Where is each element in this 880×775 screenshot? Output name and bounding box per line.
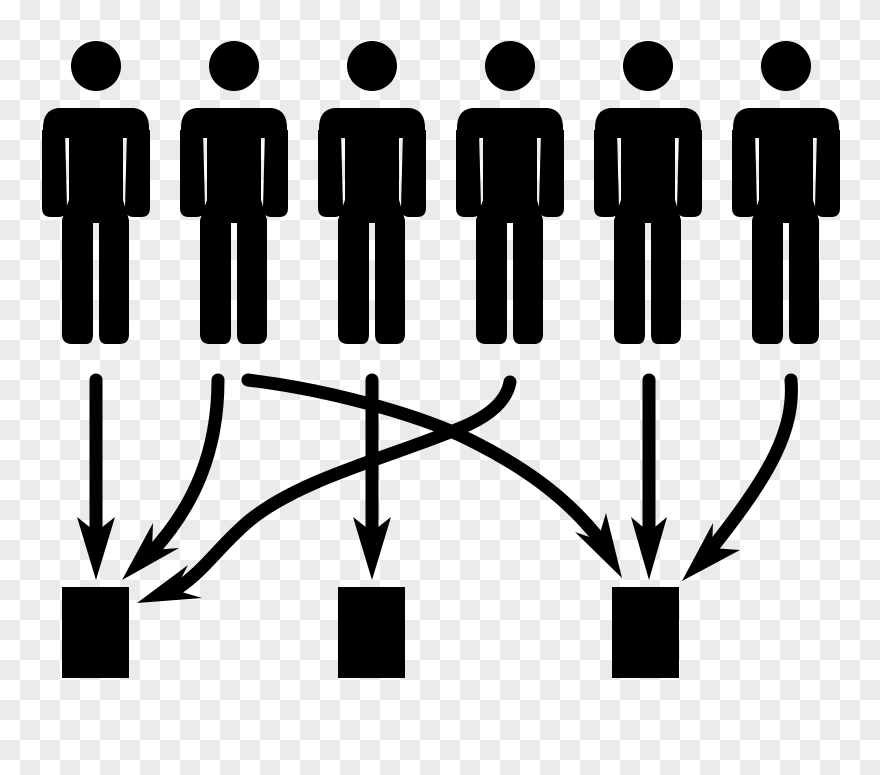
arrow: person 4 to box 1 — [137, 382, 510, 603]
arrow: person 1 to box 1 — [77, 380, 115, 580]
box 2 — [338, 587, 405, 678]
box 1 — [62, 587, 129, 678]
person 3 — [318, 41, 426, 344]
person 2 — [180, 41, 288, 344]
arrow: person 6 to box 3 — [682, 380, 791, 581]
person 6 — [732, 41, 840, 344]
arrow: person 3 to box 2 — [353, 380, 391, 580]
arrow: person 5 to box 3 — [631, 380, 667, 580]
arrow: person 2 to box 3 — [248, 380, 622, 578]
box 3 — [612, 587, 679, 678]
arrow: person 2 to box 1 — [122, 380, 218, 580]
person 5 — [594, 41, 702, 344]
person 1 — [42, 41, 150, 344]
person 4 — [456, 41, 564, 344]
